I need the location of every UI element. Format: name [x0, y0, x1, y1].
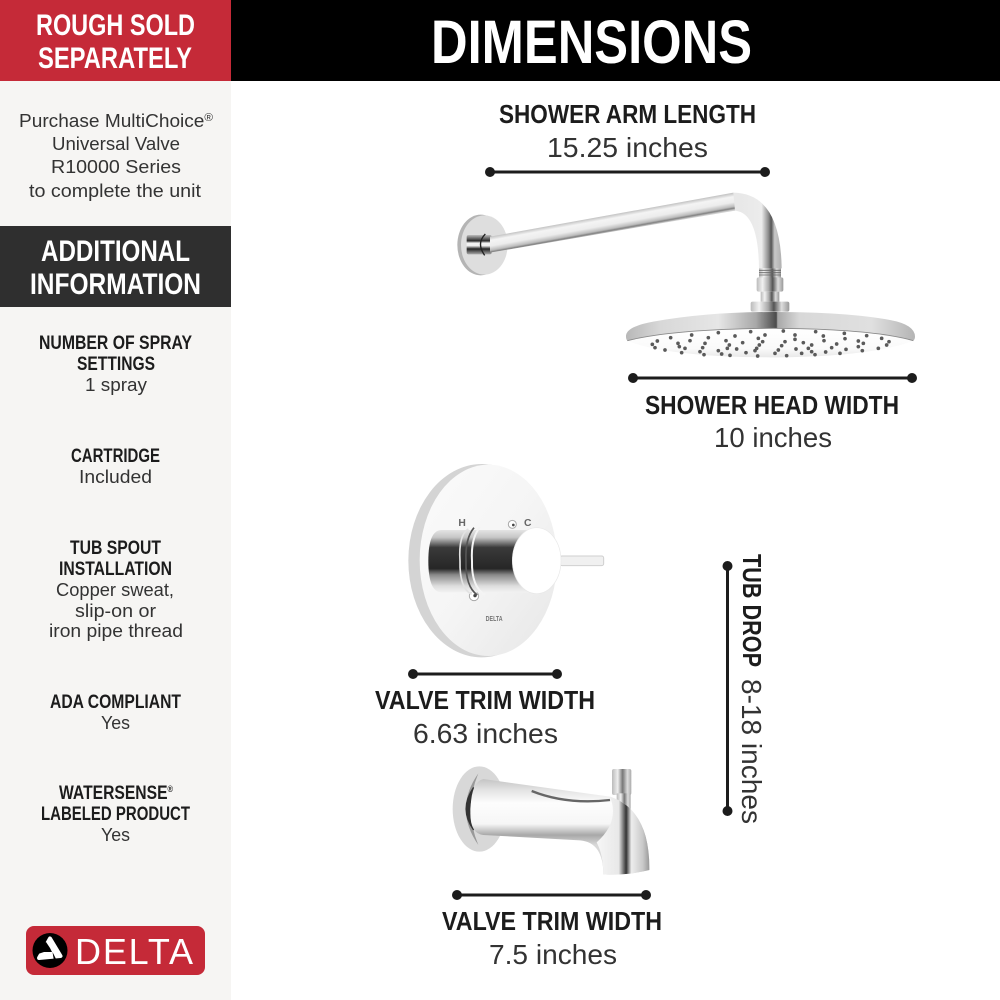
shower head	[626, 312, 915, 358]
label: tub drop	[736, 554, 767, 824]
label: valve trim width 7.5	[442, 906, 662, 970]
handle cap	[512, 528, 561, 594]
sidebar panel background	[0, 0, 231, 1000]
label: shower arm length: SHOWER ARM LENGTH	[499, 99, 756, 129]
text block: purchase note: R10000 Series	[51, 157, 181, 177]
info: watersense labeled product	[41, 783, 190, 845]
text block: purchase note: Universal Valve	[52, 134, 180, 154]
info: number of spray settings	[39, 333, 192, 395]
plate markings: DELTA	[486, 616, 503, 623]
info: tub spout installation	[49, 538, 183, 641]
info: tub spout installation: TUB SPOUT	[70, 538, 161, 559]
info: tub spout installation: INSTALLATION	[59, 559, 172, 580]
label: tub drop: TUB DROP	[737, 554, 767, 667]
info: watersense labeled product: WATERSENSE	[59, 783, 191, 804]
banner: rough sold separately: SEPARATELY	[38, 42, 192, 75]
label: shower head width	[645, 390, 899, 453]
plate markings: H	[458, 518, 466, 529]
info: ada compliant: ADA COMPLIANT	[50, 692, 181, 713]
info: ada compliant: Yes	[101, 713, 130, 733]
illustration: shower arm and head	[457, 193, 915, 358]
dimension line: shower head	[628, 373, 917, 383]
logo: delta: DELTA	[75, 931, 193, 972]
label: valve trim width 7.5: 7.5 inches	[489, 939, 617, 970]
info: cartridge: Included	[79, 467, 152, 487]
label: tub drop: 8-18 inches	[736, 679, 767, 824]
logo: delta	[26, 926, 205, 975]
info: cartridge: CARTRIDGE	[71, 446, 160, 467]
info: number of spray settings: NUMBER OF SPRAY	[39, 333, 192, 354]
banner: additional information: INFORMATION	[30, 268, 201, 301]
illustration: valve trim	[408, 464, 604, 657]
info: tub spout installation: slip-on or	[75, 601, 156, 621]
info: tub spout installation: iron pipe thread	[49, 621, 183, 641]
spray nozzles	[650, 329, 891, 358]
info: number of spray settings: 1 spray	[85, 375, 147, 395]
text block: purchase note: Purchase MultiChoice	[19, 111, 194, 131]
title banner: dimensions: DIMENSIONS	[431, 8, 752, 76]
info: number of spray settings: SETTINGS	[77, 354, 155, 375]
lever pin	[560, 556, 604, 566]
info: tub spout installation: Copper sweat,	[56, 580, 174, 600]
curved arm	[490, 193, 782, 268]
label: shower arm length: 15.25 inches	[547, 132, 708, 163]
dimension line: tub spout	[452, 890, 651, 900]
info: watersense labeled product: LABELED PRODUCT	[41, 804, 190, 825]
label: valve trim width 6.63	[375, 685, 595, 749]
text block: purchase note: ®	[204, 112, 213, 124]
illustration: tub spout	[453, 766, 649, 875]
info: watersense labeled product: Yes	[101, 825, 130, 845]
label: shower head width: 10 inches	[714, 422, 832, 453]
plate markings	[458, 518, 532, 623]
plate markings: C	[524, 518, 532, 529]
handle cylinder	[428, 527, 537, 595]
label: shower head width: SHOWER HEAD WIDTH	[645, 390, 899, 420]
dimension line: valve trim	[408, 669, 562, 679]
dimension line: tub drop	[722, 561, 732, 816]
label: valve trim width 6.63: 6.63 inches	[413, 718, 558, 749]
text block: purchase note	[19, 111, 213, 201]
title banner: dimensions	[231, 0, 1000, 81]
dimension line: shower arm	[485, 167, 770, 177]
valve plate	[408, 464, 557, 657]
info: watersense labeled product: ®	[168, 784, 173, 794]
info: ada compliant	[50, 692, 181, 733]
threaded collar and nut	[751, 268, 789, 312]
diverter knob	[612, 769, 631, 813]
banner: additional information	[0, 226, 231, 307]
info: cartridge	[71, 446, 160, 487]
banner: additional information: ADDITIONAL	[41, 235, 190, 268]
spout body	[470, 779, 649, 875]
spout flange	[453, 766, 506, 852]
text block: purchase note: to complete the unit	[29, 181, 201, 201]
arm flange	[457, 215, 508, 275]
banner: rough sold separately: ROUGH SOLD	[36, 9, 195, 42]
label: shower arm length	[499, 99, 756, 163]
label: valve trim width 6.63: VALVE TRIM WIDTH	[375, 685, 595, 715]
banner: rough sold separately	[0, 0, 231, 81]
label: valve trim width 7.5: VALVE TRIM WIDTH	[442, 906, 662, 936]
